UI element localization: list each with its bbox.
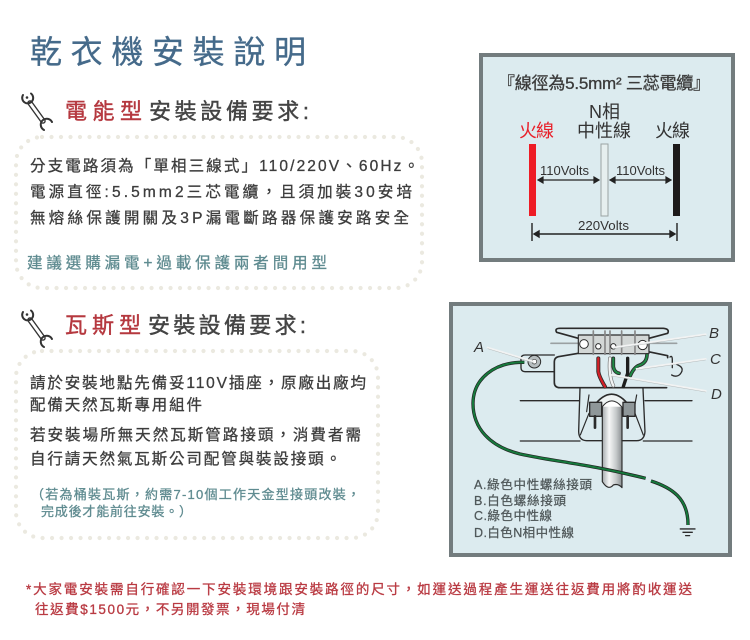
title: 乾衣機安裝說明 — [30, 34, 306, 70]
neutral wire bar — [601, 144, 608, 216]
heading: electric type: 安裝設備要求: — [149, 99, 309, 124]
text block: gas requirements — [30, 373, 366, 468]
bolts — [551, 341, 677, 346]
callout letters: A — [473, 339, 484, 356]
footnote: *大家電安裝需自行確認一下安裝環境跟安裝路徑的尺寸，如運送過程產生運送往返費用將酌收運送 — [26, 581, 692, 597]
wiring illustration — [473, 328, 706, 536]
arrow: left 110 — [538, 177, 599, 183]
arrow: 220 span — [532, 223, 677, 241]
label: 110 volts right: 110Volts — [616, 164, 665, 178]
text block: gas requirements: 若安裝場所無天然瓦斯管路接頭，消費者需 — [30, 425, 361, 444]
green ground wire — [473, 362, 688, 525]
label: 110 volts left: 110Volts — [540, 164, 589, 178]
text block: recommendation: 建議選購漏電+過載保護兩者間用型 — [27, 254, 327, 272]
internal wires — [598, 358, 605, 387]
black wire bar — [673, 144, 680, 216]
label: N phase neutral: 中性線 — [577, 121, 631, 141]
ground symbol — [680, 529, 695, 536]
label: live wire black: 火線 — [655, 121, 690, 141]
arrow: right 110 — [610, 177, 671, 183]
bracket — [579, 388, 645, 441]
legend: D.白色N相中性線 — [474, 525, 574, 540]
right bump — [670, 356, 682, 376]
junction box — [554, 352, 668, 388]
callout letters: B — [709, 325, 719, 342]
text block: barrel gas note: 完成後才能前往安裝。） — [41, 504, 192, 519]
footnote — [26, 581, 692, 617]
label: live wire red: 火線 — [519, 121, 554, 141]
panel: cable diagram — [481, 55, 733, 260]
clamps — [590, 402, 602, 416]
label: N phase neutral — [577, 102, 631, 141]
heading: gas type — [65, 313, 306, 338]
heading: electric type: 電能型 — [65, 99, 142, 124]
heading: gas type: 安裝設備要求: — [148, 313, 306, 338]
label: N phase neutral: N相 — [589, 102, 620, 122]
text block: gas requirements: 請於安裝地點先備妥110V插座，原廠出廠均 — [30, 373, 366, 392]
legend — [474, 477, 592, 540]
red wire bar — [529, 144, 536, 216]
legend: A.綠色中性螺絲接頭 — [474, 477, 592, 492]
text block: electric requirements: 無熔絲保護開關及3P漏電斷路器保護安路安全 — [30, 209, 409, 227]
text block: gas requirements: 配備天然瓦斯專用組件 — [30, 396, 202, 414]
heading: electric type — [65, 99, 309, 124]
text block: electric requirements — [30, 157, 419, 227]
pipe — [602, 405, 622, 488]
left ear — [521, 355, 554, 372]
panel: gas requirements — [16, 351, 378, 538]
panel: electric requirements — [16, 137, 422, 288]
text block: gas requirements: 自行請天然氣瓦斯公司配管與裝設接頭。 — [30, 449, 341, 468]
panel: wiring diagram — [451, 304, 730, 555]
heading: cable spec: 『線徑為5.5mm² 三蕊電纜』 — [498, 74, 710, 93]
horizontal frame lines — [520, 401, 692, 441]
callout letters: D — [711, 386, 722, 403]
terminal block — [578, 335, 649, 354]
icon: wrench (electric) — [22, 94, 52, 130]
text block: electric requirements: 電源直徑:5.5mm2三芯電纜，且須加裝30安培 — [30, 182, 412, 201]
legend: B.白色螺絲接頭 — [474, 493, 566, 508]
label: 220 volts: 220Volts — [578, 219, 629, 233]
text block: electric requirements: 分支電路須為「單相三線式」110/220V、60Hz。 — [30, 157, 419, 175]
footnote: 往返費$1500元，不另開發票，現場付清 — [35, 602, 305, 617]
top plate — [556, 328, 668, 338]
callout letters — [473, 325, 722, 403]
leader lines — [488, 334, 706, 391]
text block: barrel gas note: （若為桶裝瓦斯，約需7-10個工作天金型接頭改裝， — [31, 487, 360, 502]
callout letters: C — [710, 351, 721, 368]
heading: gas type: 瓦斯型 — [65, 313, 141, 338]
legend: C.綠色中性線 — [474, 508, 552, 523]
icon: wrench (gas) — [22, 310, 52, 347]
text block: barrel gas note — [31, 487, 360, 519]
